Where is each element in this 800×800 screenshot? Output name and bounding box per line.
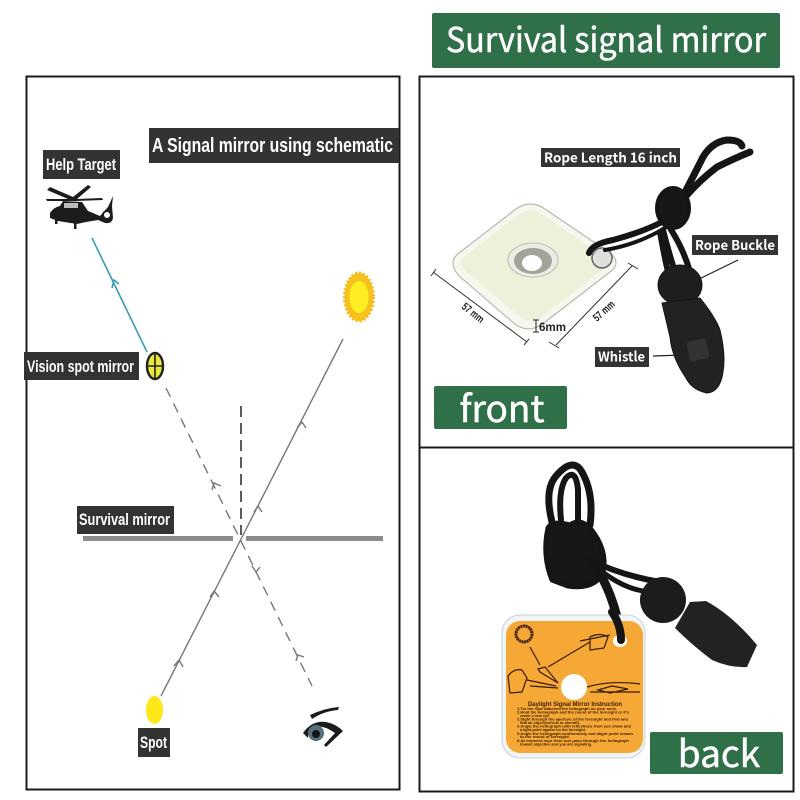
button: back: back — [678, 724, 761, 778]
mirror front — [453, 204, 616, 329]
icon: helicopter — [46, 185, 113, 229]
label: vision spot mirror: Vision spot mirror — [27, 357, 134, 376]
lanyard hole — [592, 248, 612, 268]
icon: light spot — [146, 696, 163, 724]
dimension: right 57 mm: 57 mm — [591, 298, 618, 324]
instruction text: center a near eye. — [520, 714, 550, 718]
dimension: left 57 mm: 57 mm — [459, 301, 486, 326]
lanyard slot — [613, 635, 627, 647]
instruction text: 1.Tie the rope attached the heliograph on your neck. — [517, 707, 617, 711]
dimension: 6 mm: 6mm — [539, 320, 566, 334]
instruction text: 2.Hold the heliograph and the round of the foresight or it's — [517, 710, 629, 714]
panel: front — [420, 76, 794, 448]
rope coil — [546, 465, 660, 638]
instruction text: 3.Sight through the aperture of the foresight and find and — [517, 718, 628, 722]
instruction text: a light-point appear on the foresight. — [520, 728, 586, 732]
instruction text: 4.Angle the heliograph until reflections from sun show and — [517, 724, 631, 728]
normal line — [240, 406, 242, 535]
label: help target: Help Target — [46, 155, 116, 174]
instruction text: fold an object(vehicle or aircraft). — [520, 721, 580, 725]
icon: vision spot sight — [147, 353, 163, 379]
panel: back — [420, 448, 794, 792]
button: front — [434, 379, 567, 433]
label: spot — [138, 728, 170, 757]
schematic heading: A Signal mirror using schematic — [152, 135, 393, 157]
instruction text: to the round of foresight. — [520, 735, 570, 739]
leader: rope buckle — [693, 260, 738, 282]
instruction text — [517, 701, 633, 746]
panel: schematic — [24, 76, 400, 790]
label: whistle: Whistle — [598, 346, 645, 366]
rope and whistle — [589, 140, 750, 393]
dimension: right 57 mm — [549, 263, 638, 348]
drawing: sight lines and helicopter — [508, 634, 640, 693]
icon: eye — [303, 707, 343, 747]
arrow: signal beam to target — [92, 238, 147, 352]
whistle back — [640, 577, 757, 667]
instruction text: Daylight Signal Mirror Instruction — [528, 701, 622, 708]
label: rope buckle: Rope Buckle — [695, 234, 775, 254]
instruction text: 6.At moment rays from sun pass through the heliograph — [517, 739, 629, 743]
sighting hole — [508, 243, 558, 277]
label: spot: Spot — [140, 733, 167, 752]
survival mirror bar — [83, 536, 383, 541]
leader: whistle — [653, 355, 684, 356]
mirror back card — [502, 612, 645, 758]
label: survival mirror — [77, 506, 174, 534]
title banner: Survival signal mirror — [446, 13, 767, 62]
whistle — [662, 298, 724, 393]
instruction text: 5.Angle the heliograph continuously and alight point remain — [517, 732, 633, 736]
hole — [561, 674, 587, 700]
instruction text: toward objective and you are signaling. — [520, 742, 592, 746]
label: help target — [43, 150, 120, 179]
dimension: left 57 mm — [431, 269, 529, 345]
arrow: sunlight ray to spot — [161, 339, 343, 696]
icon: sun — [344, 273, 374, 321]
label: vision spot mirror — [24, 352, 139, 380]
label: rope length: Rope Length 16 inch — [544, 146, 677, 166]
drawing: sun — [516, 626, 532, 642]
button: back — [650, 724, 783, 778]
rope buckle — [658, 265, 702, 305]
label: survival mirror: Survival mirror — [79, 510, 170, 529]
schematic heading — [149, 128, 399, 163]
arrow: dashed sight line from eye to target — [166, 388, 312, 686]
button: front: front — [460, 379, 545, 433]
